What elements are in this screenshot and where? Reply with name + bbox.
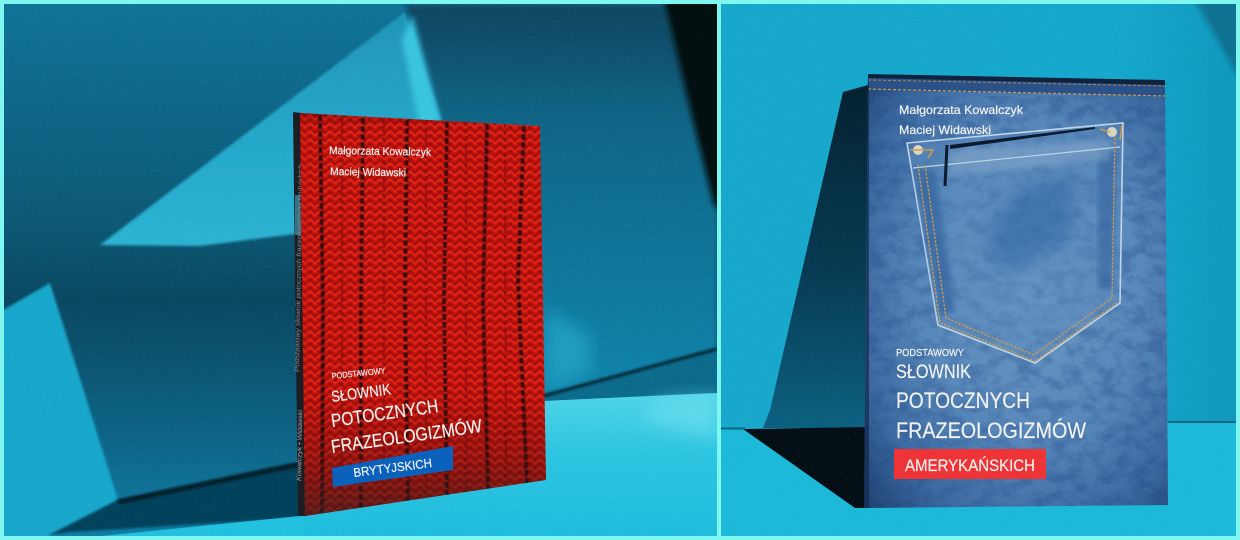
authors, British book: Maciej Widawski [330, 166, 406, 179]
fabric texture, left [4, 4, 717, 536]
book spine: Kowalczyk • Widawski [296, 409, 304, 481]
title, American book: FRAZEOLOGIZMÓW [896, 418, 1087, 443]
authors, American book: Maciej Widawski [899, 123, 991, 137]
title, American book: POTOCZNYCH [896, 388, 1030, 413]
back pocket [907, 123, 1123, 363]
authors, British book [329, 145, 432, 179]
denim mottling and grain [860, 96, 1172, 512]
label: BRYTYJSKICH [332, 446, 453, 487]
waistband [868, 74, 1165, 96]
title, British book: FRAZEOLOGIZMÓW [330, 415, 484, 457]
sofa backdrop, right photo [721, 0, 1240, 540]
label: AMERYKAŃSKICH [894, 449, 1046, 479]
book spine [293, 112, 306, 516]
authors, American book [899, 103, 1024, 137]
panel: American dictionary photo [721, 0, 1240, 540]
label: BRYTYJSKICH: BRYTYJSKICH [353, 456, 433, 480]
title, British book: PODSTAWOWY [331, 365, 386, 381]
book spine: Podstawowy słownik potocznych frazeologizmów brytyjskich [294, 163, 305, 372]
authors, American book: Małgorzata Kowalczyk [899, 103, 1024, 117]
book cover: red knit [295, 105, 555, 525]
book: British dictionary [293, 105, 555, 525]
panel: British dictionary photo [0, 0, 725, 540]
title, British book: SŁOWNIK [330, 381, 393, 406]
title, American book: PODSTAWOWY [896, 348, 964, 359]
title, American book: SŁOWNIK [896, 362, 971, 383]
book: American dictionary [860, 70, 1172, 512]
sofa backdrop, left photo [0, 0, 725, 540]
authors, British book: Małgorzata Kowalczyk [329, 145, 432, 159]
title, British book: POTOCZNYCH [330, 395, 440, 431]
title, British book [330, 365, 484, 457]
book cover: denim [860, 70, 1172, 512]
title, American book [896, 348, 1087, 443]
label: AMERYKAŃSKICH: AMERYKAŃSKICH [905, 456, 1035, 475]
fabric texture, right [721, 4, 1236, 536]
